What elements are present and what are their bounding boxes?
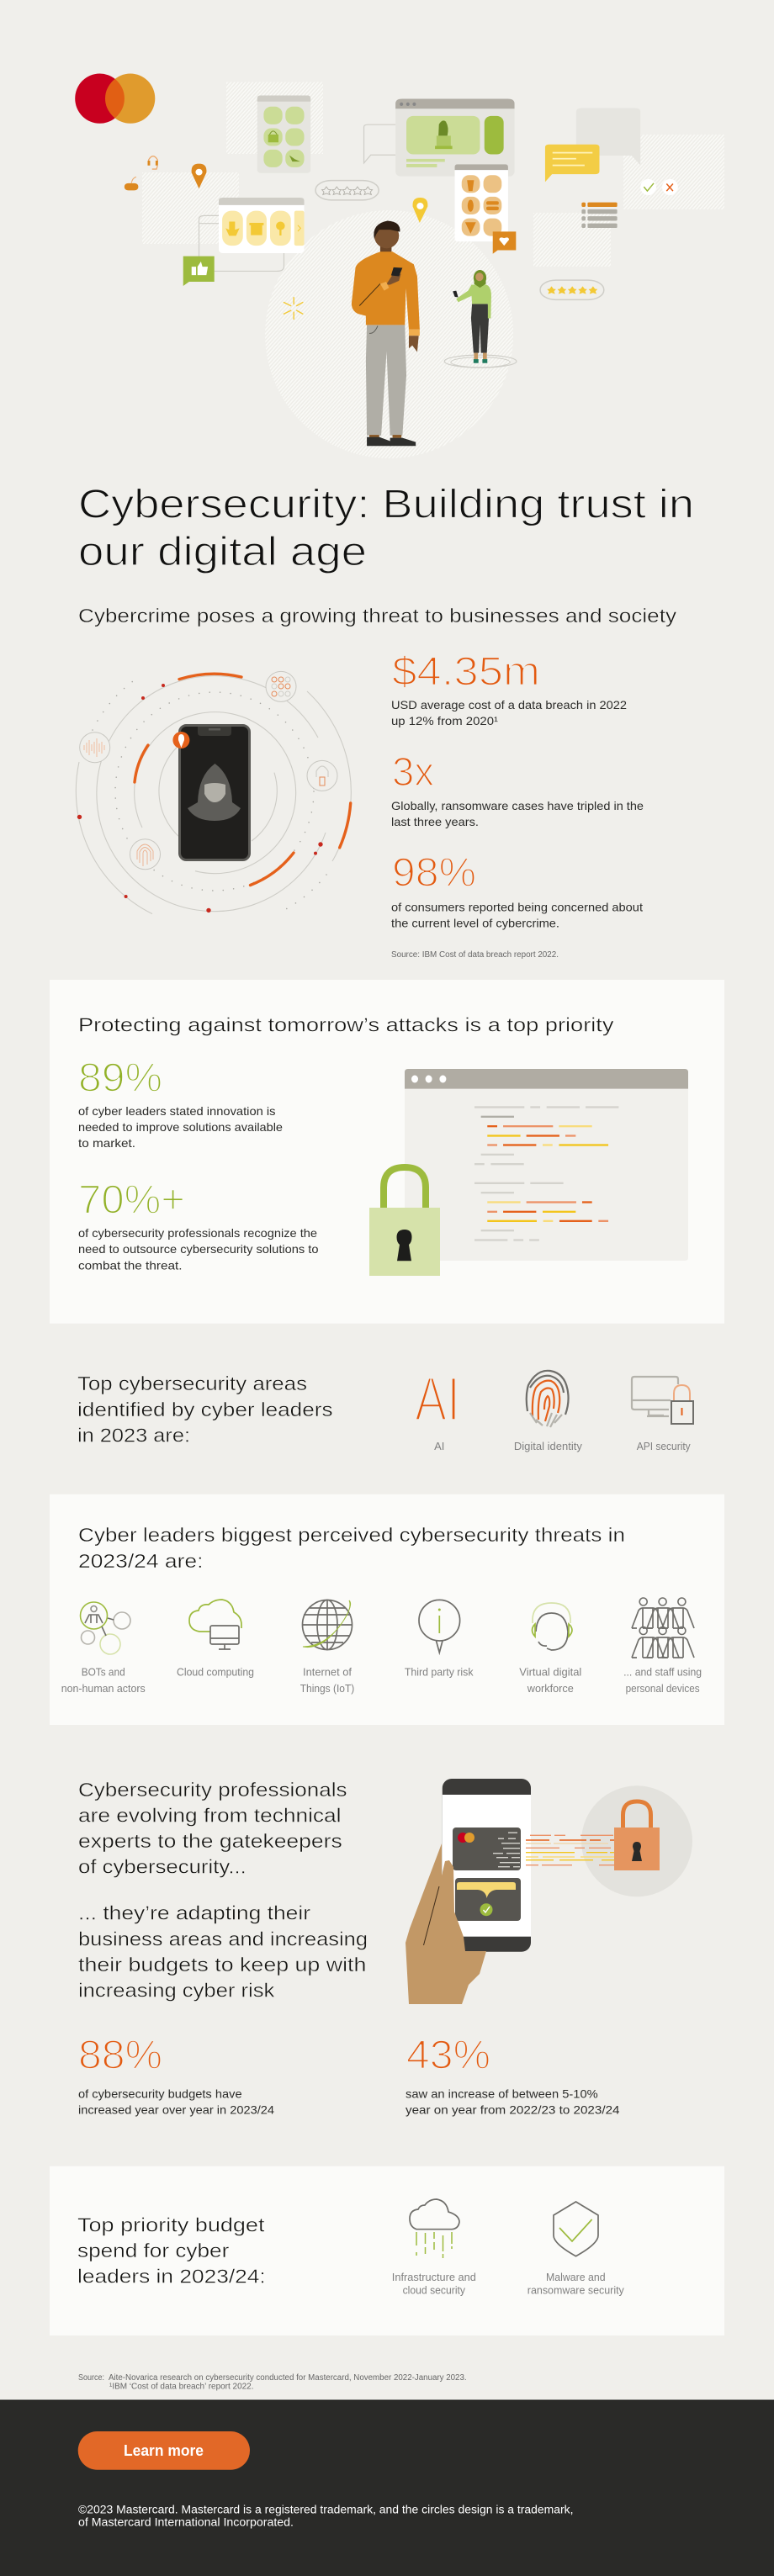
area: digital identity <box>514 1371 582 1452</box>
footer <box>0 2400 774 2576</box>
window: food menu <box>455 164 516 254</box>
spend: infrastructure and cloud: cloud security <box>403 2283 465 2296</box>
icons: pins, headset, gamepad <box>125 156 427 320</box>
badge: fingerprint <box>130 839 160 870</box>
stat: 88%: 88% <box>78 2033 162 2077</box>
threat: staff using personal devices <box>623 1598 702 1695</box>
threat: internet of things: Things (IoT) <box>300 1682 354 1695</box>
woman with phone <box>444 270 517 368</box>
text block: gatekeepers: Cybersecurity professionals <box>78 1779 347 1801</box>
window: shop grid <box>257 96 310 173</box>
stat: 43%: saw an increase of between 5-10% <box>406 2087 598 2100</box>
hero illustration <box>75 73 724 458</box>
heading: top cybersecurity areas: Top cybersecurity areas <box>77 1373 307 1394</box>
stat: 98% <box>391 851 643 930</box>
stat: 4.35m: $4.35m <box>392 649 540 695</box>
panel: top priority budget spend <box>50 2166 724 2335</box>
area: API security: API security <box>637 1440 691 1452</box>
stat: 43% <box>406 2033 620 2116</box>
area: digital identity: Digital identity <box>514 1440 582 1452</box>
badge: voice wave <box>80 733 110 763</box>
stat: 3x: last three years. <box>391 815 479 828</box>
text block: gatekeepers: increasing cyber risk <box>78 1979 275 2001</box>
phone <box>443 1779 531 1952</box>
stat: 43%: 43% <box>406 2033 490 2077</box>
threat: virtual digital workforce: Virtual digital <box>519 1666 581 1679</box>
threat: staff using personal devices: personal devices <box>626 1682 700 1695</box>
panel heading: Top priority budget <box>77 2214 265 2235</box>
stat: 98%: 98% <box>392 851 476 896</box>
stat: 70%+: of cybersecurity professionals recognize the <box>78 1226 317 1240</box>
spend: malware and ransomware: ransomware security <box>527 2283 624 2296</box>
copyright <box>78 2503 574 2528</box>
stat: 98%: the current level of cybercrime. <box>391 917 559 930</box>
area: AI: AI <box>434 1440 444 1452</box>
stat: 3x: Globally, ransomware cases have tripled in the <box>391 799 644 812</box>
threat: internet of things: Internet of <box>303 1666 352 1679</box>
text block: gatekeepers: of cybersecurity... <box>78 1856 247 1878</box>
heading: top cybersecurity areas: in 2023 are: <box>77 1424 190 1446</box>
threat: third party risk <box>405 1600 474 1679</box>
area: API security <box>632 1377 693 1452</box>
badge: keypad <box>266 671 296 701</box>
speech bubble outline <box>364 124 395 163</box>
stat: 98%: of consumers reported being concerned about <box>391 900 643 913</box>
threat: cloud computing <box>177 1600 254 1679</box>
title <box>78 483 694 574</box>
stat: 89%: to market. <box>78 1136 135 1150</box>
spend: malware and ransomware <box>527 2202 624 2296</box>
text block: gatekeepers: experts to the gatekeepers <box>78 1830 342 1852</box>
copyright: of Mastercard International Incorporated. <box>78 2515 294 2528</box>
stat: 88%: increased year over year in 2023/24 <box>78 2103 274 2116</box>
text block: gatekeepers <box>78 1779 368 2001</box>
chat bubbles <box>545 108 640 182</box>
threat: bots: non-human actors <box>61 1682 146 1695</box>
panel heading: 2023/24 are: <box>78 1550 204 1572</box>
text block: gatekeepers: ... they’re adapting their <box>78 1902 310 1924</box>
stat: 89%: 89% <box>78 1056 162 1101</box>
panel heading: Protecting against tomorrow’s attacks is a top priority <box>78 1014 614 1036</box>
stat: 70%+: combat the threat. <box>78 1258 182 1272</box>
man with phone <box>352 220 420 446</box>
panel: biggest perceived threats <box>50 1494 724 1725</box>
stat: 3x <box>391 750 644 828</box>
heading: top cybersecurity areas <box>77 1373 333 1446</box>
title: Cybersecurity: Building trust in <box>78 483 694 526</box>
sources: Source: <box>78 2373 104 2383</box>
window: gifts carousel <box>219 198 305 253</box>
stat: 4.35m: USD average cost of a data breach in 2022 <box>391 698 627 711</box>
stat: 70%+: need to outsource cybersecurity solutions to <box>78 1242 319 1256</box>
threat: bots <box>61 1602 146 1695</box>
back window outline <box>199 215 284 271</box>
spend: infrastructure and cloud: Infrastructure and <box>392 2271 476 2283</box>
browser window with code <box>405 1069 688 1261</box>
stat: 70%+: 70%+ <box>78 1178 185 1223</box>
copyright: ©2023 Mastercard. Mastercard is a registered trademark, and the circles design is a trademark, <box>78 2503 574 2515</box>
check and cross badges <box>640 179 678 195</box>
stat: 4.35m: up 12% from 2020¹ <box>391 714 498 727</box>
panel heading: leaders in 2023/24: <box>77 2265 266 2287</box>
spend: infrastructure and cloud <box>392 2199 476 2296</box>
list icon <box>581 203 618 228</box>
stat: 89% <box>78 1056 283 1150</box>
phone with hooded figure <box>172 725 249 860</box>
heading: top cybersecurity areas: identified by cyber leaders <box>77 1399 333 1420</box>
hand <box>406 1843 486 2004</box>
source note: Source: IBM Cost of data breach report 2022. <box>391 950 559 960</box>
five star rating <box>540 280 604 299</box>
stat: 43%: year on year from 2022/23 to 2023/24 <box>406 2103 620 2116</box>
button: learn more: Learn more <box>124 2442 204 2459</box>
data streaks <box>526 1835 618 1865</box>
thumbs up bubble <box>183 257 215 286</box>
sources: ¹IBM ‘Cost of data breach’ report 2022. <box>109 2382 254 2391</box>
padlock <box>614 1801 660 1870</box>
threat: third party risk: Third party risk <box>405 1666 474 1679</box>
window: product page <box>395 98 515 177</box>
orbit illustration: hooded hacker on phone <box>76 671 351 914</box>
stat: 4.35m <box>391 649 627 727</box>
panel heading: Cyber leaders biggest perceived cybersecurity threats in <box>78 1524 625 1546</box>
text block: gatekeepers: business areas and increasing <box>78 1928 368 1949</box>
panel: protecting against attacks <box>50 980 724 1324</box>
icon: padlock <box>369 1167 440 1276</box>
area: AI <box>415 1364 460 1452</box>
stat: 88% <box>78 2033 274 2116</box>
section heading: cybercrime: Cybercrime poses a growing threat to businesses and society <box>78 605 676 627</box>
panel heading <box>78 1524 625 1572</box>
Mastercard logo <box>75 73 155 124</box>
stat: 70%+ <box>78 1178 319 1272</box>
text block: gatekeepers: are evolving from technical <box>78 1805 341 1827</box>
stat: 3x: 3x <box>392 750 434 795</box>
stat: 89%: needed to improve solutions available <box>78 1120 283 1134</box>
panel heading <box>77 2214 266 2287</box>
rating outline <box>315 181 379 200</box>
threat: bots: BOTs and <box>82 1666 125 1679</box>
text block: gatekeepers: their budgets to keep up with <box>78 1954 366 1976</box>
threat: internet of things <box>300 1600 354 1695</box>
stat: 88%: of cybersecurity budgets have <box>78 2087 242 2100</box>
threat: cloud computing: Cloud computing <box>177 1666 254 1679</box>
illustration: hand holding phone and padlock <box>406 1779 692 2004</box>
area: AI: AI <box>415 1364 460 1434</box>
threat: virtual digital workforce: workforce <box>527 1682 574 1695</box>
threat: staff using personal devices: ... and staff using <box>623 1666 702 1679</box>
sources: Aite-Novarica research on cybersecurity conducted for Mastercard, November 2022-January 2023. <box>109 2373 467 2383</box>
badge: padlock <box>307 760 337 791</box>
stat: 89%: of cyber leaders stated innovation is <box>78 1104 276 1118</box>
panel heading: spend for cyber <box>77 2240 229 2261</box>
button: learn more <box>78 2431 250 2470</box>
sources <box>78 2373 467 2391</box>
spend: malware and ransomware: Malware and <box>546 2271 606 2283</box>
threat: virtual digital workforce <box>519 1603 581 1695</box>
title: our digital age <box>78 530 367 574</box>
